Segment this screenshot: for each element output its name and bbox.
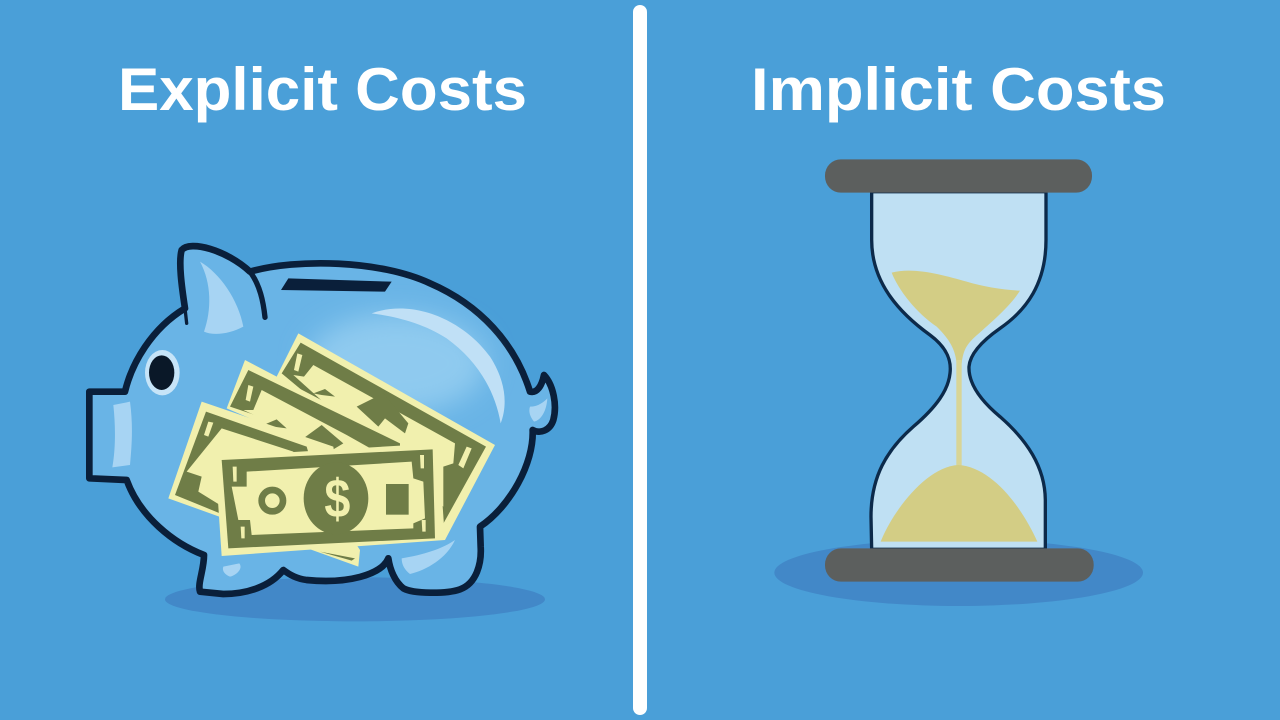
snout highlight [112, 402, 132, 467]
heading: Implicit Costs: Implicit Costs [751, 56, 1166, 123]
body gloss highlight [372, 309, 505, 423]
bill: front-left [168, 402, 360, 567]
coin slot [281, 278, 392, 292]
right square [386, 484, 409, 515]
bill: middle [227, 360, 433, 497]
pig ground shadow [165, 577, 545, 621]
hourglass ground shadow [774, 539, 1143, 606]
falling sand stream [956, 360, 962, 468]
divider line [633, 5, 647, 715]
upper body glow [307, 313, 487, 413]
glass [871, 192, 1046, 549]
heading: Explicit Costs: Explicit Costs [118, 56, 527, 123]
bill: front with dollar sign [215, 443, 445, 556]
left ring [262, 490, 283, 511]
top sand [892, 271, 1020, 363]
pig body [89, 246, 555, 594]
ear highlight [200, 262, 243, 334]
bill: back [277, 333, 495, 540]
bottom cap [825, 548, 1094, 582]
medallion [304, 462, 368, 534]
bottom sand [881, 465, 1037, 542]
foot highlights [223, 563, 241, 577]
top cap [825, 159, 1092, 193]
ear inner line [250, 272, 265, 317]
illustration: piggy bank with dollar bills [89, 246, 555, 621]
dollar sign: $ [324, 467, 350, 529]
ear base line [185, 308, 187, 323]
eye [145, 350, 180, 395]
tail highlight [529, 398, 547, 422]
illustration: hourglass [774, 159, 1143, 606]
